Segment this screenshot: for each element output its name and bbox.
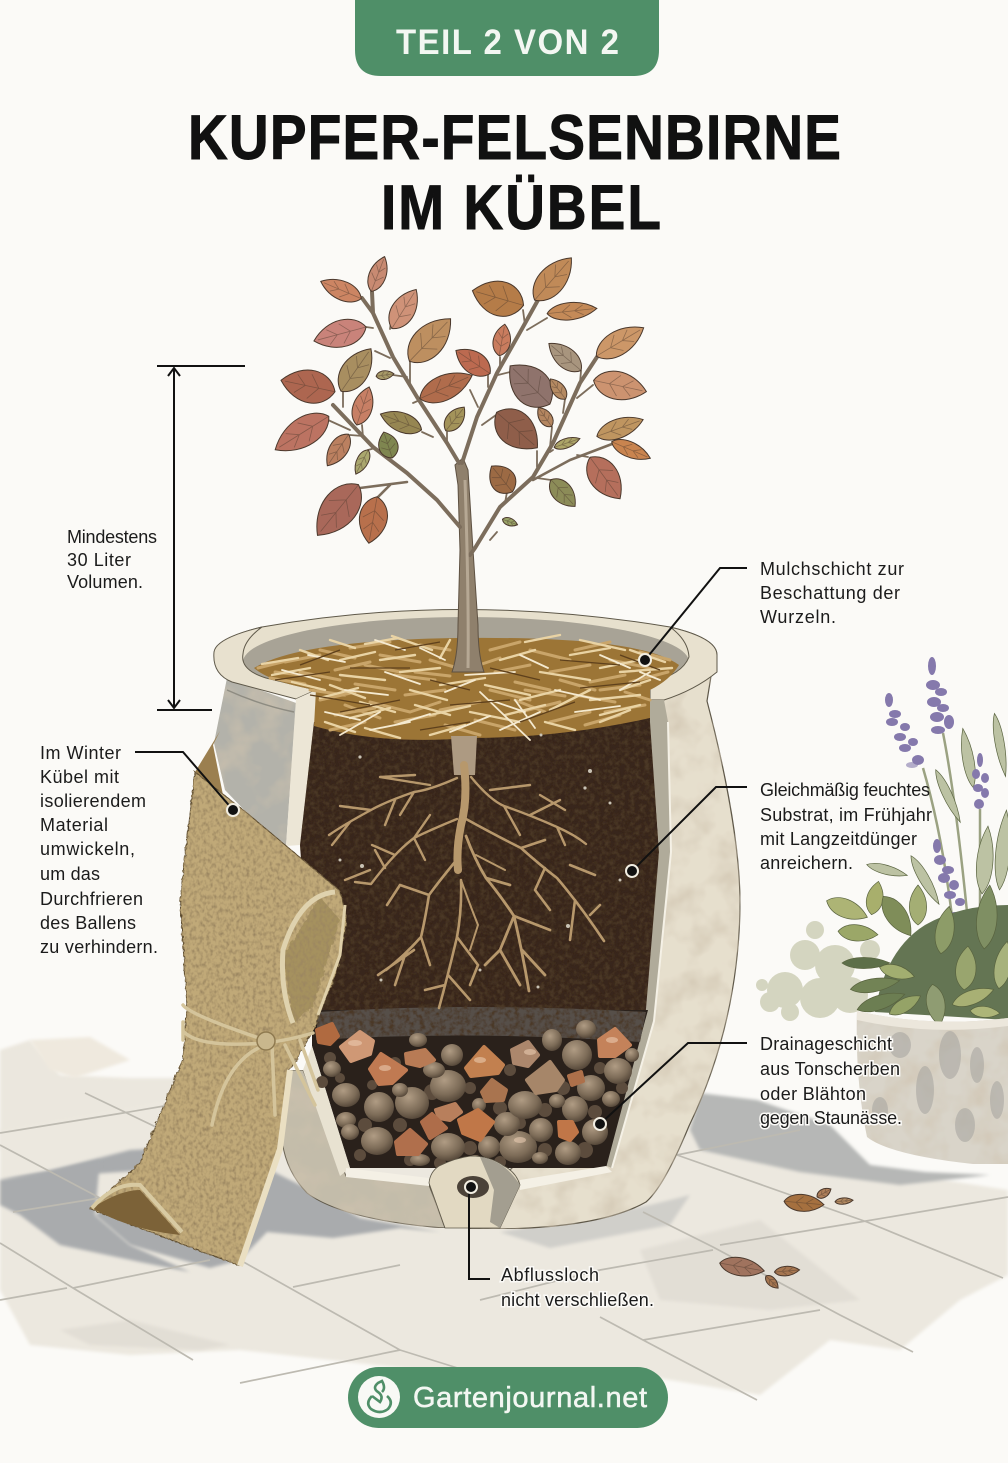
callout: winter wrap: Durchfrieren bbox=[40, 889, 143, 909]
callout: drainage: Drainageschicht bbox=[760, 1034, 892, 1054]
herb leaves bbox=[823, 880, 1008, 1027]
callout: drain hole: nicht verschließen. bbox=[501, 1290, 654, 1310]
pot lower-left outer face bbox=[282, 1070, 445, 1228]
footer logo pill bbox=[348, 1367, 668, 1428]
root ball collar bbox=[451, 736, 477, 775]
lavender flowers bbox=[885, 657, 989, 918]
lavender stems bbox=[923, 733, 980, 1000]
text: volume: 30 Liter bbox=[67, 550, 131, 570]
right cut face bbox=[604, 700, 671, 1168]
callout: mulch bbox=[639, 559, 904, 666]
mulch layer bbox=[254, 635, 679, 740]
callout: drain hole bbox=[465, 1181, 654, 1310]
right cut highlight bbox=[612, 722, 671, 1168]
callout: mulch: Beschattung der bbox=[760, 583, 900, 603]
leaves on ground bbox=[718, 1185, 853, 1291]
callout: winter wrap: Im Winter bbox=[40, 743, 121, 763]
callout: substrate: mit Langzeitdünger bbox=[760, 829, 917, 849]
callout: winter wrap: zu verhindern. bbox=[40, 937, 158, 957]
rim inside shadow bbox=[243, 617, 689, 707]
twine knot bbox=[257, 1032, 275, 1050]
trunk bbox=[452, 458, 484, 672]
cut floor edge right bbox=[520, 1166, 612, 1190]
title: KUPFER-FELSENBIRNE bbox=[188, 104, 841, 173]
title: IM KÜBEL bbox=[381, 174, 661, 243]
cut floor edge left bbox=[346, 1168, 429, 1186]
burlap cloth bbox=[90, 772, 347, 1266]
fold inside bbox=[283, 897, 340, 1023]
paved ground bbox=[0, 1037, 1008, 1400]
illustration: pot cutaway bbox=[214, 610, 740, 1229]
callout: substrate bbox=[626, 780, 932, 877]
fold edge bbox=[282, 892, 335, 1023]
left rim lip bbox=[214, 627, 316, 699]
text: volume bbox=[67, 527, 157, 592]
burlap hem edge bbox=[92, 1185, 182, 1232]
illustration: tree bbox=[268, 249, 653, 672]
burlap back flap bbox=[195, 731, 225, 805]
callout: drainage: aus Tonscherben bbox=[760, 1059, 900, 1079]
left cut face bbox=[286, 690, 316, 846]
callout: winter wrap: isolierendem bbox=[40, 791, 146, 811]
pale upright blades bbox=[866, 713, 1008, 907]
right rim lip bbox=[650, 627, 717, 700]
callout: winter wrap: Kübel mit bbox=[40, 767, 119, 787]
footer logo pill: Gartenjournal.net bbox=[413, 1382, 647, 1414]
transition gravel bbox=[316, 1007, 646, 1042]
pot body bbox=[470, 670, 740, 1229]
twine bbox=[183, 1005, 318, 1125]
back rim bbox=[214, 610, 717, 700]
callout: mulch: Mulchschicht zur bbox=[760, 559, 904, 579]
callout: drainage: oder Blähton bbox=[760, 1084, 866, 1104]
callout: drainage: gegen Staunässe. bbox=[760, 1108, 902, 1128]
callout: winter wrap bbox=[40, 743, 239, 957]
title bbox=[188, 104, 841, 243]
burlap hem opening bbox=[92, 1190, 180, 1235]
trunk highlight bbox=[465, 480, 468, 668]
callout: winter wrap: des Ballens bbox=[40, 913, 136, 933]
soil bbox=[300, 716, 659, 1012]
callout: winter wrap: umwickeln, bbox=[40, 839, 135, 859]
callout: drain hole: Abflussloch bbox=[501, 1265, 599, 1285]
callout: drainage bbox=[594, 1034, 902, 1130]
callout: substrate: anreichern. bbox=[760, 853, 853, 873]
small background stones bbox=[316, 1052, 628, 1169]
text: volume: Volumen. bbox=[67, 572, 143, 592]
clay stones bbox=[316, 1020, 639, 1169]
badge: Teil 2 von 2 bbox=[355, 0, 659, 76]
illustration: lavender and herb planter bbox=[756, 657, 1008, 1164]
pot collar line bbox=[227, 690, 294, 712]
notch and drain hole bbox=[429, 1156, 520, 1228]
icon: logo circle bbox=[358, 1376, 400, 1418]
pot upper-left outer face bbox=[214, 678, 296, 846]
callout: winter wrap: Material bbox=[40, 815, 108, 835]
roots bbox=[329, 765, 604, 1008]
callout: substrate: Gleichmäßig feuchtes bbox=[760, 780, 930, 800]
callout: winter wrap: um das bbox=[40, 864, 100, 884]
leaves bbox=[268, 249, 653, 546]
soil specks bbox=[338, 734, 622, 988]
badge: Teil 2 von 2: TEIL 2 VON 2 bbox=[396, 23, 619, 62]
branches bbox=[328, 292, 612, 555]
dimension marker: volume bbox=[157, 366, 245, 710]
callout: substrate: Substrat, im Frühjahr bbox=[760, 805, 932, 825]
text: volume: Mindestens bbox=[67, 527, 157, 547]
illustration: burlap wrap bbox=[90, 731, 347, 1266]
pale foliage bbox=[756, 921, 880, 1021]
callout: mulch: Wurzeln. bbox=[760, 607, 836, 627]
lower-left cut strip bbox=[303, 1046, 350, 1176]
planter bbox=[857, 1011, 1008, 1164]
drainage base bbox=[312, 1010, 648, 1168]
